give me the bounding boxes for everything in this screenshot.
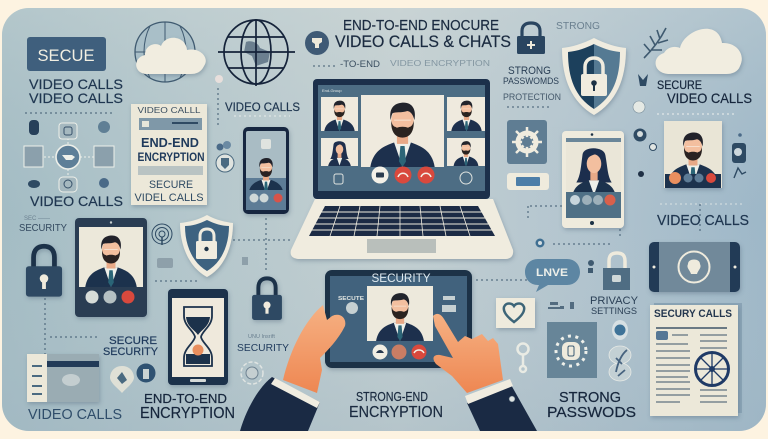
call buttons	[372, 344, 426, 360]
label: security: SECURITY	[19, 223, 67, 234]
icon: small badges	[215, 75, 234, 172]
label: security	[19, 216, 67, 234]
faint tiny icons	[548, 302, 574, 309]
left hand and sleeve	[240, 305, 345, 431]
badge: SECUE	[27, 37, 106, 71]
settings chip	[507, 173, 549, 190]
icon: fingerprint ring	[241, 362, 263, 384]
label: video calls: VIDEO CALLS	[30, 193, 123, 209]
label: security: SEC ——	[24, 216, 50, 222]
label: video calls: VIDEO CALLS	[657, 213, 749, 229]
laptop screen: End-Group	[322, 88, 342, 93]
phone: hourglass	[168, 289, 228, 385]
icon: map pins	[110, 364, 156, 393]
screen heading: SECURITY	[372, 273, 431, 285]
label: security: UNU Insrift	[248, 334, 275, 340]
call controls	[334, 166, 472, 184]
label: strong passwords protection: STRONG	[508, 65, 551, 77]
label: privacy settings: PRIVACY	[590, 295, 639, 307]
icon: cloud over globe	[135, 22, 206, 82]
document: end-end encryption: VIDEL CALLS	[134, 192, 204, 204]
label: video calls: VIDEO CALLS	[28, 407, 122, 423]
card: heart icon	[496, 298, 535, 328]
label: strong passwods: STRONG	[559, 389, 621, 406]
dotted connector lines	[25, 66, 745, 355]
label: secure video calls: VIDEO CALLS	[667, 90, 752, 106]
tablet: woman on call	[562, 131, 624, 228]
icon: small badge	[536, 238, 544, 248]
screen side labels: SECUTE	[338, 296, 364, 302]
badge: SECUE: SECUE	[38, 46, 94, 65]
keyboard	[309, 206, 495, 236]
label: privacy settings: SETTINGS	[591, 306, 637, 317]
title: END-TO-END ENOCURE	[343, 18, 499, 34]
video tile: main speaker	[361, 95, 444, 167]
label: strong passwords protection	[503, 65, 561, 103]
label: strong passwords protection: PROTECTION	[503, 92, 561, 103]
label: secure video calls	[657, 80, 752, 106]
icon: title badge	[305, 31, 329, 55]
trackpad	[367, 239, 436, 253]
title: VIDEO CALLS & CHATS	[335, 33, 511, 51]
icon: globe	[218, 19, 295, 86]
label: strong passwods	[547, 389, 636, 421]
label: secure security: SECURE	[109, 335, 157, 347]
video tile	[367, 286, 433, 341]
label: video calls twice: VIDEO CALLS	[29, 76, 123, 92]
shield with padlock	[180, 215, 233, 277]
right hand and sleeve	[433, 314, 537, 431]
speech bubble: LNVE: LNVE	[536, 267, 568, 279]
label: video calls twice: VIDEO CALLS	[29, 90, 123, 106]
icon: padlock	[26, 246, 62, 297]
document: secury calls	[650, 303, 742, 416]
laptop	[291, 79, 513, 259]
hourglass	[184, 307, 212, 366]
label: strong-end encryption: STRONG-END	[356, 390, 428, 404]
label: end-to-end encryption	[140, 392, 235, 422]
video card: man	[664, 121, 722, 188]
label: end-to-end encryption: END-TO-END	[144, 392, 227, 406]
screen side labels	[338, 296, 456, 314]
icon: key	[518, 344, 528, 372]
label: end-to-end encryption: ENCRYPTION	[140, 405, 235, 422]
faint label: strong: STRONG	[556, 21, 600, 32]
icon: padlock	[517, 23, 545, 54]
tile: strong password icon	[547, 322, 597, 378]
speech bubble: LNVE	[525, 259, 580, 292]
icon: pale padlock	[588, 253, 630, 290]
subtitle: -TO-END	[340, 59, 381, 69]
wheel icon	[696, 352, 728, 386]
video tiles: participants	[321, 97, 485, 166]
document: end-end encryption: END-END	[141, 135, 199, 150]
phone: video call	[243, 127, 289, 214]
subtitle: VIDEO ENCRYPTION	[390, 59, 490, 68]
icon: leaf sprig	[644, 28, 668, 58]
small smudges	[157, 257, 248, 268]
small scattered icons	[633, 74, 746, 178]
laptop base	[291, 199, 513, 259]
label: strong-end encryption: ENCRYPTION	[349, 404, 443, 421]
label: strong passwods: PASSWODS	[547, 404, 636, 421]
icon: padlock	[252, 278, 282, 320]
card: secure login window	[27, 354, 99, 402]
icon: gear	[507, 120, 547, 164]
label: security: SECURITY	[237, 342, 289, 354]
subtitle	[340, 59, 490, 69]
label: video calls: VIDEO CALLS	[225, 100, 300, 114]
document: end-end encryption: ENCRYPTION	[138, 150, 204, 164]
label: security	[237, 334, 289, 354]
cloud	[656, 29, 742, 74]
label: secure security	[103, 335, 159, 358]
label: secure security: SECURITY	[103, 346, 159, 358]
label: strong passwords protection: PASSWOMDS	[503, 76, 559, 86]
document: secury calls: SECURY CALLS	[654, 308, 732, 320]
label: strong-end encryption	[349, 390, 443, 421]
title	[335, 18, 511, 51]
icons: badges	[609, 320, 631, 381]
laptop screen	[313, 79, 490, 199]
tablet: man on call	[75, 218, 147, 317]
label: privacy settings	[590, 295, 639, 317]
tablet held in hands	[325, 270, 472, 368]
document: end-end encryption: VIDEO CALLL	[138, 105, 201, 115]
icon: wifi signal	[152, 224, 172, 245]
landscape phone	[649, 242, 740, 292]
diagram: connected security nodes	[24, 120, 114, 192]
document: end-end encryption	[131, 104, 207, 205]
label: video calls twice	[29, 76, 123, 106]
shield with padlock	[562, 38, 626, 115]
document: end-end encryption: SECURE	[149, 179, 193, 191]
label: secure video calls: SECURE	[657, 80, 702, 92]
